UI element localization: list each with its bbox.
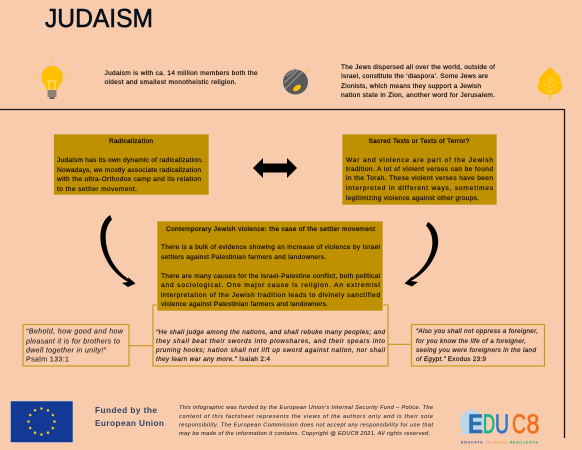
logo: speech bubble bbox=[460, 410, 484, 434]
body: contemporary violence bbox=[161, 244, 381, 308]
quote: exodus: for you know the life of a foreigner, bbox=[416, 338, 526, 345]
panel: exodus quote bbox=[412, 324, 544, 366]
quote: psalm: “Behold, how good and how bbox=[26, 328, 124, 336]
quote: exodus: seeing you were foreigners in the land bbox=[416, 347, 536, 354]
funding label: Funded by the bbox=[95, 405, 157, 415]
logo: wordmark: E bbox=[468, 409, 483, 439]
quote: psalm: Psalm 133:1 bbox=[26, 356, 69, 364]
frame: black rule around main area bbox=[0, 110, 564, 438]
quote: isaiah: pruning hooks; nation shall not lift up sword against nation, nor shall bbox=[155, 347, 386, 354]
disclaimer: content of this factsheet represents the views of the authors only and is their sole bbox=[179, 414, 433, 420]
quote: psalm: pleasant it is for brothers to bbox=[25, 338, 120, 346]
logo: tagline: EDUCATE TO BUILD RESILIENCE bbox=[461, 440, 538, 444]
logo: wordmark bbox=[468, 409, 540, 439]
body: contemporary violence: settlers against Palestinian farmers and landowners. bbox=[161, 254, 326, 261]
quote: isaiah: “He shall judge among the nations, and shall rebuke many peoples; and bbox=[156, 329, 385, 336]
quote: exodus: of Egypt.” Exodus 23:9 bbox=[416, 356, 486, 363]
intro text: diaspora: The Jews dispersed all over the world, outside of bbox=[341, 64, 495, 71]
icon: light bulb bbox=[34, 59, 70, 99]
intro text: diaspora: Israel, constitute the ‘diaspora’. Some Jews are bbox=[341, 73, 488, 80]
connector: centre to right quote bbox=[388, 343, 411, 345]
panel: contemporary Jewish violence bbox=[157, 221, 383, 311]
disclaimer: responsibility. The European Commission does not accept any responsibility for use that bbox=[179, 422, 433, 428]
body: sacred texts: legitimizing violence against other groups. bbox=[346, 195, 479, 202]
heading: radicalization: Radicalization bbox=[109, 138, 153, 145]
logo: wordmark: 8 bbox=[526, 409, 540, 439]
quote: psalm bbox=[25, 328, 124, 364]
logo: wordmark: C bbox=[512, 409, 526, 439]
body: sacred texts bbox=[346, 157, 494, 202]
arrow: curved left bbox=[100, 215, 136, 287]
body: radicalization: to the settler movement. bbox=[57, 186, 137, 193]
funding label bbox=[95, 405, 164, 428]
panel: sacred texts bbox=[342, 134, 497, 205]
body: sacred texts: tradition. A lot of violent verses can be found bbox=[346, 166, 493, 173]
icon: grey striped disc bbox=[283, 69, 308, 99]
body: contemporary violence: There are many causes for the Israel-Palestine conflict, both political bbox=[161, 273, 381, 280]
body: contemporary violence: interpretation of the Jewish tradition leads to divinely sanctified bbox=[161, 292, 380, 299]
intro text: diaspora: nation state in Zion, another word for Jerusalem. bbox=[341, 92, 495, 99]
intro text: diaspora: Zionists, which means they support a Jewish bbox=[341, 83, 481, 90]
intro text: Judaism: Judaism is with ca. 14 million members both the bbox=[104, 70, 258, 77]
body: contemporary violence: There is a bulk of evidence showing an increase of violence by Israel bbox=[161, 244, 381, 251]
body: contemporary violence: violence against Palestinian farmers and landowners. bbox=[161, 301, 328, 308]
quote: exodus bbox=[416, 328, 538, 363]
arrow: curved right bbox=[404, 222, 438, 286]
connector: left quote to centre bbox=[129, 345, 153, 347]
body: sacred texts: interpreted in different ways, sometimes bbox=[346, 185, 494, 192]
icon: EU flag bbox=[10, 401, 73, 442]
quote: exodus: “Also you shall not oppress a foreigner, bbox=[416, 328, 538, 335]
body: radicalization bbox=[56, 157, 203, 193]
disclaimer: This infographic was funded by the European Union’s Internal Security Fund – Police. The bbox=[179, 405, 433, 411]
quote: isaiah: they learn war any more.” Isaiah 2:4 bbox=[156, 356, 270, 363]
funding label: European Union bbox=[95, 418, 164, 428]
body: radicalization: Judaism has its own dynamic of radicalization. bbox=[57, 157, 203, 164]
icon: yellow leaf bbox=[538, 67, 562, 100]
quote: isaiah bbox=[155, 329, 386, 363]
body: contemporary violence: and sociological. One major cause is religion. An extremist bbox=[161, 282, 380, 289]
body: sacred texts: in the Torah. These violent verses have been bbox=[346, 175, 493, 182]
quote: psalm: dwell together in unity!” bbox=[26, 346, 107, 354]
arrow: double-headed black bbox=[253, 158, 297, 178]
logo: wordmark: D bbox=[483, 409, 495, 439]
heading: contemporary violence: Contemporary Jewish violence: the case of the settler movement bbox=[166, 226, 375, 233]
panel: isaiah quote bbox=[153, 305, 388, 366]
intro text: Judaism bbox=[104, 70, 258, 86]
logo: wordmark: U bbox=[495, 409, 509, 439]
heading: sacred texts: Sacred Texts or Texts of Terror? bbox=[368, 138, 470, 145]
logo: EDUC8 bbox=[460, 409, 540, 444]
disclaimer: may be made of the information it contains. Copyright @ EDUC8 2021. All rights reserved. bbox=[179, 431, 430, 437]
body: radicalization: with the ultra-Orthodox camp and its relation bbox=[56, 176, 201, 183]
intro text: Judaism: oldest and smallest monotheistic religion. bbox=[104, 79, 237, 86]
disclaimer bbox=[179, 405, 433, 437]
panel: radicalization bbox=[54, 134, 209, 195]
intro text: diaspora bbox=[341, 64, 495, 99]
quote: isaiah: they shall beat their swords into plowshares, and their spears into bbox=[156, 338, 385, 345]
title: JUDAISM bbox=[45, 3, 153, 33]
body: radicalization: Nowadays, we mostly associate radicalization bbox=[57, 167, 201, 174]
body: sacred texts: War and violence are part of the Jewish bbox=[346, 157, 493, 164]
panel: psalm quote bbox=[23, 324, 129, 366]
